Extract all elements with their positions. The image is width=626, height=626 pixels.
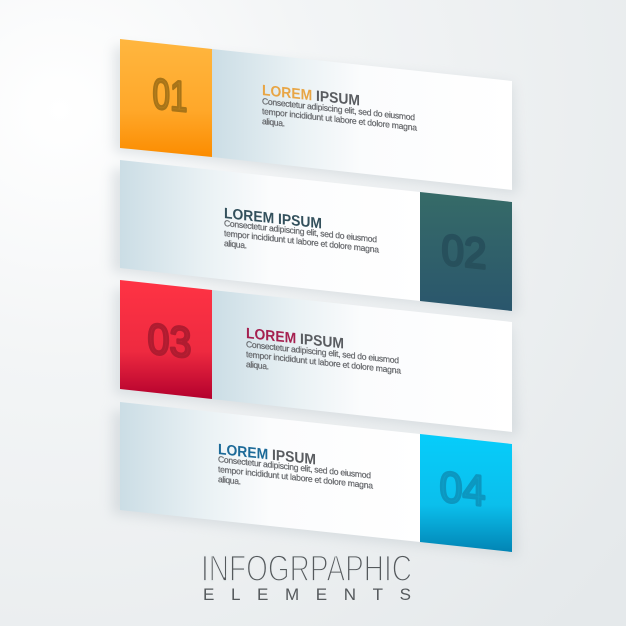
panel 4 body text: tempor incididunt ut labore et dolore magna: [218, 464, 373, 491]
panel 2: [120, 160, 512, 311]
number 04: 04: [440, 463, 486, 516]
panel 2 teal tab: [420, 192, 512, 311]
title line: elements: ELEMENTS: [203, 585, 411, 604]
panel 1 white banner: [212, 49, 512, 190]
panel 2 body text: tempor incididunt ut labore et dolore magna: [224, 228, 379, 255]
panel 3 body text: aliqua.: [246, 359, 269, 371]
panel 1 heading: LOREM IPSUM: [262, 82, 360, 109]
panel shadows: [112, 46, 518, 556]
panel 3 red tab: [120, 280, 212, 399]
panel 4 body text: Consectetur adipiscing elit, sed do eiusmod: [218, 454, 371, 480]
panel 1 body text: aliqua.: [262, 116, 285, 128]
panel 3 body text: Consectetur adipiscing elit, sed do eiusmod: [246, 339, 399, 365]
panel 3 heading: LOREM IPSUM: [246, 325, 344, 352]
panel 3 body text: tempor incididunt ut labore et dolore magna: [246, 349, 401, 376]
panel 2 body text: aliqua.: [224, 238, 247, 250]
number 01: 01: [152, 70, 188, 122]
number 03: 03: [148, 315, 192, 368]
panel 1: [120, 39, 512, 190]
panel 2 heading: LOREM IPSUM: [224, 205, 322, 232]
number 02: 02: [442, 226, 486, 279]
panel 1 body text: Consectetur adipiscing elit, sed do eiusmod: [262, 96, 415, 122]
panel 3: [120, 280, 512, 432]
panel 3 white banner: [212, 290, 512, 432]
panel 4: [120, 402, 512, 552]
panel 4 blue tab: [420, 434, 512, 552]
panel 2 body text: Consectetur adipiscing elit, sed do eiusmod: [224, 218, 377, 244]
panel 2 white banner: [120, 160, 420, 301]
panel 4 white banner: [120, 402, 420, 542]
panel 1 orange tab: [120, 39, 212, 157]
title line: infographic: INFOGRPAPHIC: [201, 548, 412, 589]
panel 4 body text: aliqua.: [218, 474, 241, 486]
panel 1 body text: tempor incididunt ut labore et dolore magna: [262, 106, 417, 133]
panel 4 heading: LOREM IPSUM: [218, 441, 316, 468]
title: [201, 548, 412, 604]
